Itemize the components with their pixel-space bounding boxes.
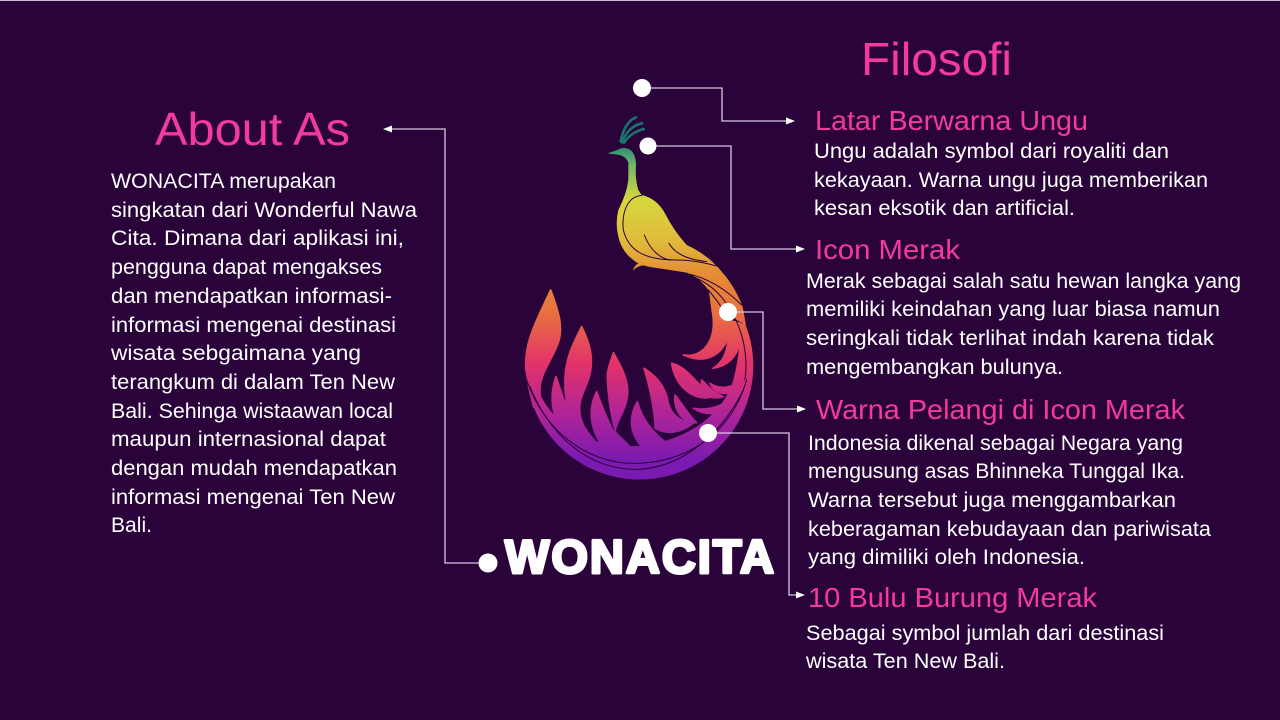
text block: about: terangkum di dalam Ten New [111,370,395,394]
peacock crest [621,117,644,143]
text block: Latar Berwarna Ungu [814,139,1208,220]
text block: Latar Berwarna Ungu: kesan eksotik dan artificial. [814,196,1075,220]
text block: 10 Bulu [805,621,1164,673]
text block: about: dan mendapatkan informasi- [111,284,392,308]
peacock foot [633,263,647,271]
text block: Warna Pelangi: keberagaman kebudayaan dan pariwisata [808,517,1211,541]
text block: Latar Berwarna Ungu: Ungu adalah symbol dari royaliti dan [814,139,1169,163]
text block: about: informasi mengenai Ten New [111,485,395,509]
heading: 10 Bulu Burung Merak: 10 Bulu Burung Merak [808,582,1097,613]
text block: Warna Pelangi [808,431,1211,569]
panel: About As [110,103,417,537]
heading: About As: About As [155,103,350,155]
text block: about: dengan mudah mendapatkan [111,456,397,480]
text block: Warna Pelangi: Indonesia dikenal sebagai Negara yang [808,431,1183,455]
text block: Warna Pelangi: mengusung asas Bhinneka Tunggal Ika. [808,459,1185,483]
panel: Latar Berwarna Ungu [814,105,1208,220]
text block: about: WONACITA merupakan [111,169,336,193]
panel: Icon Merak [806,234,1241,379]
heading: Warna Pelangi di Icon Merak: Warna Pelangi di Icon Merak [816,394,1185,425]
connector: 10 Bulu [699,424,805,598]
rim of the circle [526,323,753,480]
tail feathers and flames [526,290,748,453]
text block: Icon Merak: mengembangkan bulunya. [806,355,1063,379]
panel: Warna Pelangi di Icon Merak [808,394,1211,569]
text block: about: Bali. [111,513,152,537]
text block: about: wisata sebgaimana yang [110,341,361,365]
text block: Icon Merak [806,269,1241,379]
heading: Icon Merak: Icon Merak [815,234,960,265]
text block: about: pengguna dapat mengakses [111,255,382,279]
connector: Warna Pelangi [719,303,806,412]
connector: About As [383,126,498,572]
connector: Latar Berwarna Ungu [633,79,795,124]
text block: Warna Pelangi: Warna tersebut juga menggambarkan [808,488,1176,512]
text block: Icon Merak: Merak sebagai salah satu hewan langka yang [806,269,1241,293]
text block: Warna Pelangi: yang dimiliki oleh Indonesia. [808,545,1085,569]
text block: 10 Bulu: Sebagai symbol jumlah dari destinasi [806,621,1164,645]
text block: Latar Berwarna Ungu: kekayaan. Warna ungu juga memberikan [814,168,1208,192]
heading: Latar Berwarna Ungu: Latar Berwarna Ungu [815,105,1088,136]
text block: Icon Merak: memiliki keindahan yang luar biasa namun [806,297,1220,321]
panel: 10 Bulu Burung Merak [805,582,1164,673]
icon: peacock logo [526,117,753,480]
text block: 10 Bulu: wisata Ten New Bali. [805,649,1005,673]
connector: Icon Merak [640,138,805,252]
heading: Filosofi: Filosofi [861,33,1012,85]
peacock body and tail [607,148,746,325]
text block: Icon Merak: seringkali tidak terlihat indah karena tidak [806,326,1214,350]
text block: about: Bali. Sehinga wistaawan local [111,399,393,423]
text block: about: singkatan dari Wonderful Nawa [111,198,417,222]
feather lines [527,195,747,469]
text block: about: Cita. Dimana dari aplikasi ini, [111,226,404,250]
text block: about: maupun internasional dapat [111,427,386,451]
text block: about [110,169,417,537]
wordmark: WONACITA: WONACITA [505,530,774,583]
text block: about: informasi mengenai destinasi [111,313,396,337]
